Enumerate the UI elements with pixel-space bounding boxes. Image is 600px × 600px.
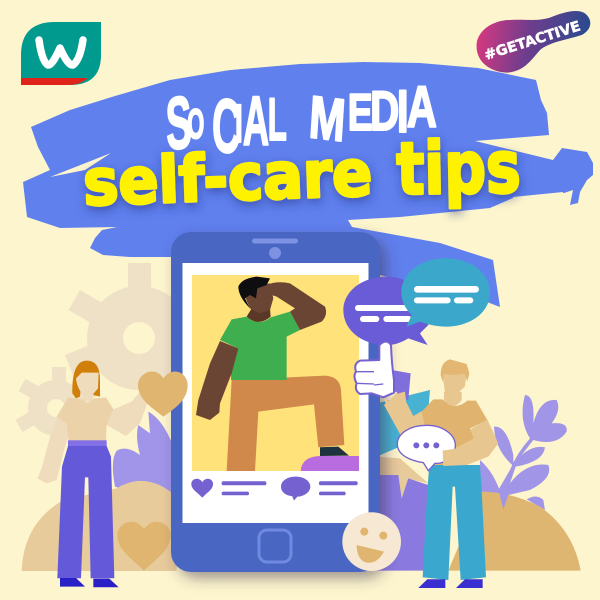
purple speech bubble [343, 277, 428, 345]
icon: heart [191, 479, 213, 498]
leaf sprig [494, 395, 567, 509]
title: self-care tips: self-care [82, 137, 373, 221]
step [301, 456, 359, 471]
trousers [227, 376, 344, 471]
held heart [138, 371, 188, 417]
post lines [222, 481, 358, 495]
home button [259, 530, 291, 562]
purple leaf [377, 475, 428, 571]
thumbs up sleeve [392, 370, 411, 400]
title: SOCIAL MEDIA: D [370, 81, 399, 143]
left arm [196, 341, 238, 420]
photo [192, 275, 359, 471]
title: SOCIAL MEDIA: A [243, 82, 269, 160]
head [442, 372, 467, 397]
raised arm [384, 390, 433, 440]
screen [182, 263, 368, 523]
small speech bubble [397, 425, 455, 471]
trousers [57, 446, 114, 578]
head [245, 283, 273, 313]
man figure right [384, 359, 498, 588]
front arm [442, 419, 498, 465]
logo: Watsons [21, 22, 101, 85]
shoes [418, 579, 483, 588]
title: SOCIAL MEDIA: S [165, 81, 193, 166]
badge: #GETACTIVE: #GETACTIVE [482, 18, 583, 64]
mound right [448, 492, 581, 571]
shoe [320, 447, 349, 456]
title: self-care tips: tips [396, 125, 521, 211]
shirt [220, 312, 300, 380]
title: SOCIAL MEDIA: I [235, 94, 243, 155]
trousers [423, 465, 486, 580]
woman figure [37, 361, 188, 587]
icon: comment bubble [281, 477, 310, 501]
shirt [422, 399, 487, 465]
hand on bubble [443, 448, 467, 466]
heart in mound [117, 522, 171, 571]
speaker [252, 238, 298, 244]
left plants and mound [22, 412, 177, 571]
title: SOCIAL MEDIA: E [348, 83, 373, 141]
neck [247, 308, 271, 322]
man in photo and post [191, 277, 359, 501]
title: SOCIAL MEDIA: A [407, 74, 437, 140]
hair [238, 277, 270, 308]
title: self-care tips [82, 125, 521, 221]
shoes [60, 578, 119, 587]
icon: smiley [342, 512, 401, 571]
background gears [15, 263, 210, 436]
phone body [171, 232, 380, 572]
badge: #GETACTIVE [477, 11, 590, 73]
raised hand [383, 392, 406, 412]
gear: large [65, 263, 210, 390]
tan leaf [377, 457, 428, 498]
camera [269, 247, 281, 259]
hair [72, 361, 100, 398]
mound left [22, 481, 177, 571]
title: SOCIAL MEDIA: I [397, 79, 409, 146]
neck [444, 392, 462, 406]
teal speech bubble [401, 258, 490, 327]
phone [171, 232, 380, 572]
neck and face [76, 373, 99, 402]
raised arm [107, 392, 150, 436]
teal leaf [377, 390, 430, 457]
right plants and mound [377, 390, 581, 571]
hair [441, 359, 469, 382]
title: SOCIAL MEDIA [165, 74, 437, 170]
back arm [37, 417, 73, 483]
purple leaf behind mound [480, 460, 545, 510]
thumbs up finger lines [356, 372, 383, 385]
purple leaves left [113, 412, 173, 497]
gear: small [15, 367, 97, 436]
title: SOCIAL MEDIA: M [307, 84, 347, 155]
title: SOCIAL MEDIA: C [211, 81, 242, 170]
brush stroke banner [23, 62, 593, 307]
title: SOCIAL MEDIA: L [268, 87, 287, 154]
thumbs up and speech bubbles [343, 258, 490, 412]
raised arm [267, 282, 326, 330]
thumbs up hand [354, 342, 394, 397]
title: SOCIAL MEDIA: O [187, 102, 204, 148]
torso [57, 397, 115, 441]
waistband [68, 440, 107, 446]
